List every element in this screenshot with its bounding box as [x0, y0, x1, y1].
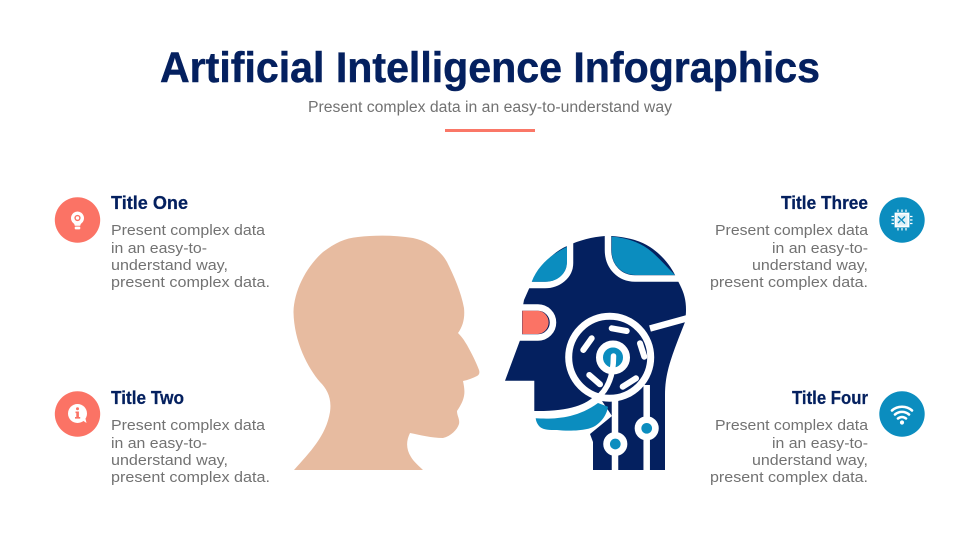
body text: Present complex data: [111, 417, 266, 434]
jaw panel: [536, 403, 608, 431]
body text: Present complex data: [715, 222, 869, 239]
AI head: [505, 232, 690, 472]
body text: understand way,: [752, 257, 868, 274]
panel: title three: [710, 193, 925, 291]
icon: wifi: [879, 391, 925, 437]
body text: Present complex data: [715, 417, 869, 434]
body text: in an easy-to-: [772, 435, 868, 452]
panel: title four: [710, 388, 925, 486]
body text: understand way,: [111, 257, 228, 274]
body text: present complex data.: [710, 469, 868, 486]
body text: [710, 417, 869, 486]
human head silhouette: [294, 236, 479, 470]
body text: present complex data.: [111, 274, 270, 291]
sensor dial: [569, 316, 651, 398]
heading: Title Four: [792, 388, 868, 408]
panel: title one: [55, 193, 270, 291]
heading: Title One: [111, 193, 188, 213]
heading: Title Two: [111, 388, 184, 408]
icon: info bubble: [55, 391, 100, 437]
body text: in an easy-to-: [111, 435, 207, 452]
body text: in an easy-to-: [772, 240, 868, 257]
icon: light bulb: [55, 197, 100, 243]
subtitle: Present complex data in an easy-to-understand way: [308, 99, 672, 116]
body text: [710, 222, 869, 291]
title underline: [445, 129, 535, 132]
body text: present complex data.: [111, 469, 270, 486]
heading: Title Three: [781, 193, 868, 213]
body text: [111, 222, 270, 291]
circuit node one: [607, 435, 624, 453]
top-right panel: [612, 236, 675, 275]
body text: understand way,: [111, 452, 228, 469]
body text: in an easy-to-: [111, 240, 207, 257]
nose panel: [522, 311, 549, 334]
top-left panel: [532, 247, 567, 282]
body text: present complex data.: [710, 274, 868, 291]
circuit lines: [514, 232, 690, 472]
title: Artificial Intelligence Infographics: [160, 44, 820, 92]
panel: title two: [55, 388, 270, 486]
body text: understand way,: [752, 452, 868, 469]
body text: Present complex data: [111, 222, 266, 239]
body text: [111, 417, 270, 486]
icon: microchip: [879, 197, 925, 243]
circuit node two: [638, 420, 655, 437]
head silhouette: [505, 236, 686, 470]
